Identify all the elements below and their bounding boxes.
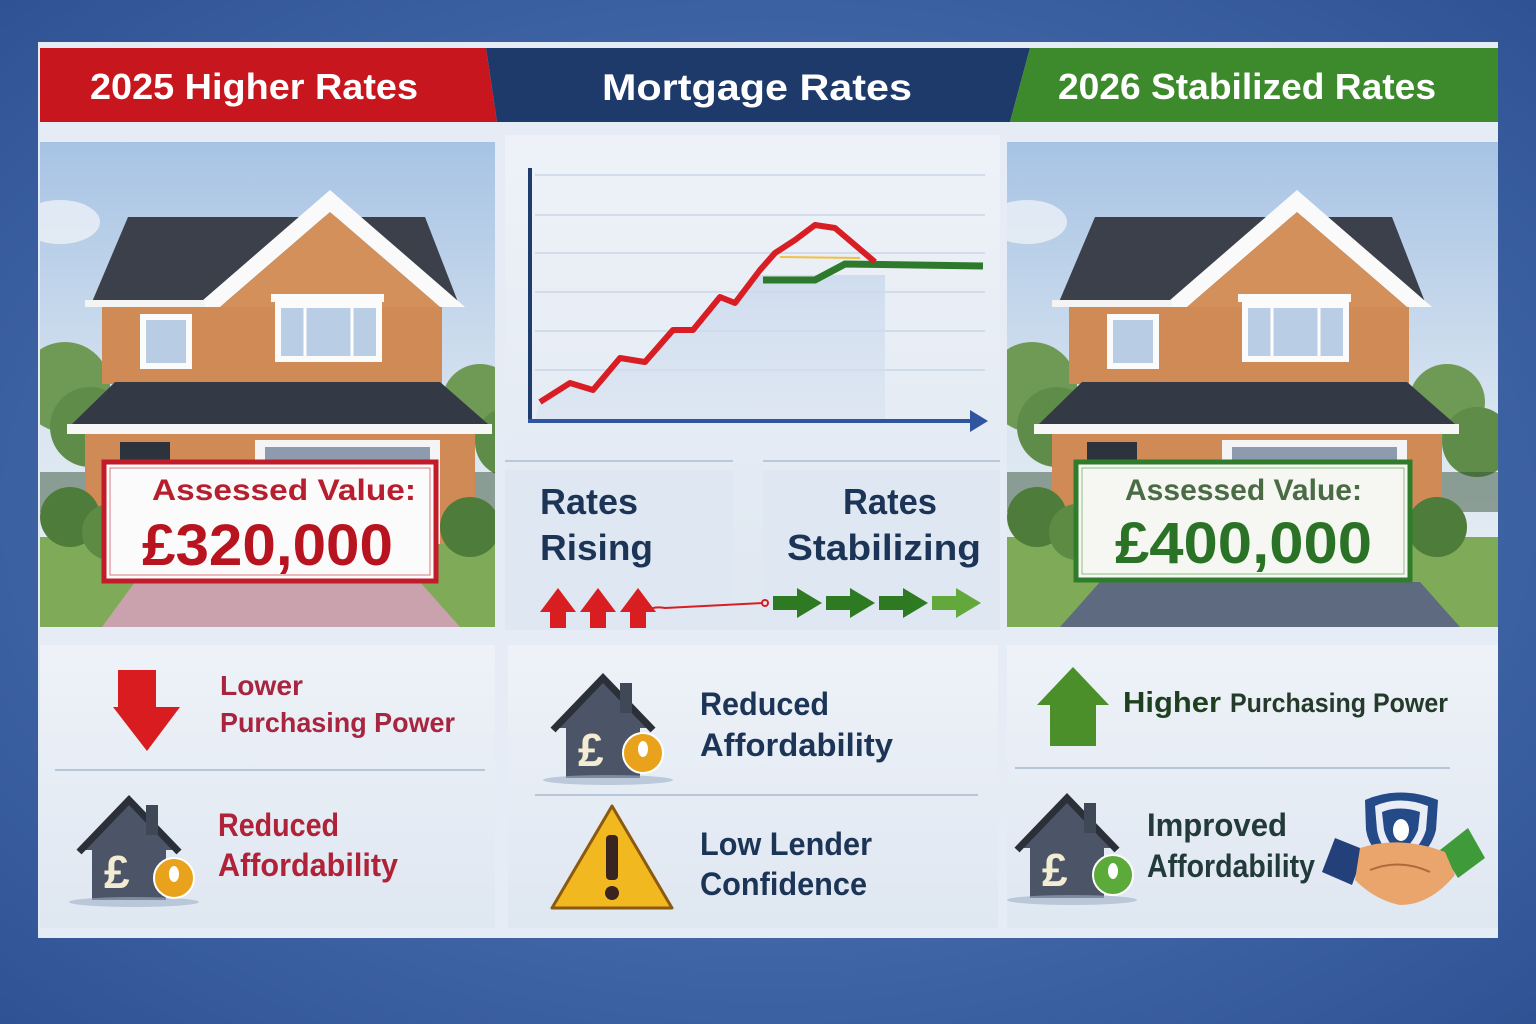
- panel: chart: [505, 135, 1000, 630]
- text: rates rising: [505, 470, 733, 630]
- text: low lender confidence: [700, 826, 872, 902]
- text: improved affordability: Improved: [1147, 807, 1287, 843]
- icon: warning triangle: [552, 806, 672, 908]
- text: low lender confidence: Confidence: [700, 866, 867, 902]
- icon: handshake and shield: [1322, 792, 1485, 905]
- callout: assessed value 2025: [104, 462, 436, 581]
- icon: red down arrow: [113, 670, 180, 751]
- text: reduced affordability: Reduced: [700, 686, 829, 722]
- text: higher purchasing power: Higher: [1123, 687, 1221, 719]
- text: improved affordability: Affordability: [1147, 848, 1315, 884]
- icon: house with pound: [543, 678, 673, 785]
- text: rates stabilizing: Rates: [843, 481, 937, 522]
- text: improved affordability: [1147, 807, 1315, 884]
- callout: assessed value 2026: [1076, 462, 1410, 580]
- header: 2025 Higher Rates: [40, 48, 497, 122]
- text: lower purchasing power: Purchasing Power: [220, 707, 455, 738]
- callout: assessed value 2026: £400,000: [1115, 511, 1372, 576]
- header: 2025 Higher Rates: 2025 Higher Rates: [90, 66, 418, 107]
- callout: assessed value 2025: Assessed Value:: [152, 474, 416, 507]
- icon: green right arrows: [773, 588, 981, 618]
- text: reduced affordability: Reduced: [218, 807, 339, 843]
- header: Mortgage Rates: [486, 48, 1030, 122]
- panel: 2025 effects: [40, 645, 495, 928]
- text: rates rising: Rates: [540, 481, 638, 522]
- header: 2026 Stabilized Rates: 2026 Stabilized Rates: [1058, 66, 1436, 107]
- icon: house with pound: [1007, 798, 1137, 905]
- text: low lender confidence: Low Lender: [700, 826, 872, 862]
- line: stabilizing: [763, 264, 983, 280]
- header: 2026 Stabilized Rates: [1010, 48, 1498, 122]
- text: reduced affordability: Affordability: [218, 847, 398, 883]
- text: higher purchasing power: Purchasing Power: [1230, 688, 1448, 718]
- panel: middle effects: [508, 645, 998, 928]
- line: rising: [540, 225, 875, 402]
- axes: [528, 168, 532, 422]
- callout: assessed value 2026: Assessed Value:: [1125, 474, 1362, 507]
- text: rates stabilizing: Stabilizing: [787, 527, 981, 568]
- icon: green up arrow: [1037, 667, 1109, 746]
- icon: house with pound: [69, 800, 199, 907]
- text: reduced affordability: [218, 807, 398, 883]
- text: lower purchasing power: Lower: [220, 670, 303, 701]
- text: reduced affordability: Affordability: [700, 727, 893, 763]
- panel: 2025 house: [40, 142, 495, 627]
- text: rates rising: Rising: [540, 527, 653, 568]
- header: Mortgage Rates: Mortgage Rates: [602, 67, 912, 108]
- icon: red up arrows: [540, 588, 768, 628]
- callout: assessed value 2025: £320,000: [142, 513, 393, 578]
- text: reduced affordability: [700, 686, 893, 763]
- panel: 2026 house: [987, 142, 1512, 627]
- chart area fill: [535, 275, 885, 420]
- text: rates stabilizing: [763, 470, 1000, 630]
- panel: 2026 effects: [1007, 645, 1498, 928]
- text: lower purchasing power: [220, 670, 455, 738]
- text: higher purchasing power: [1123, 687, 1448, 719]
